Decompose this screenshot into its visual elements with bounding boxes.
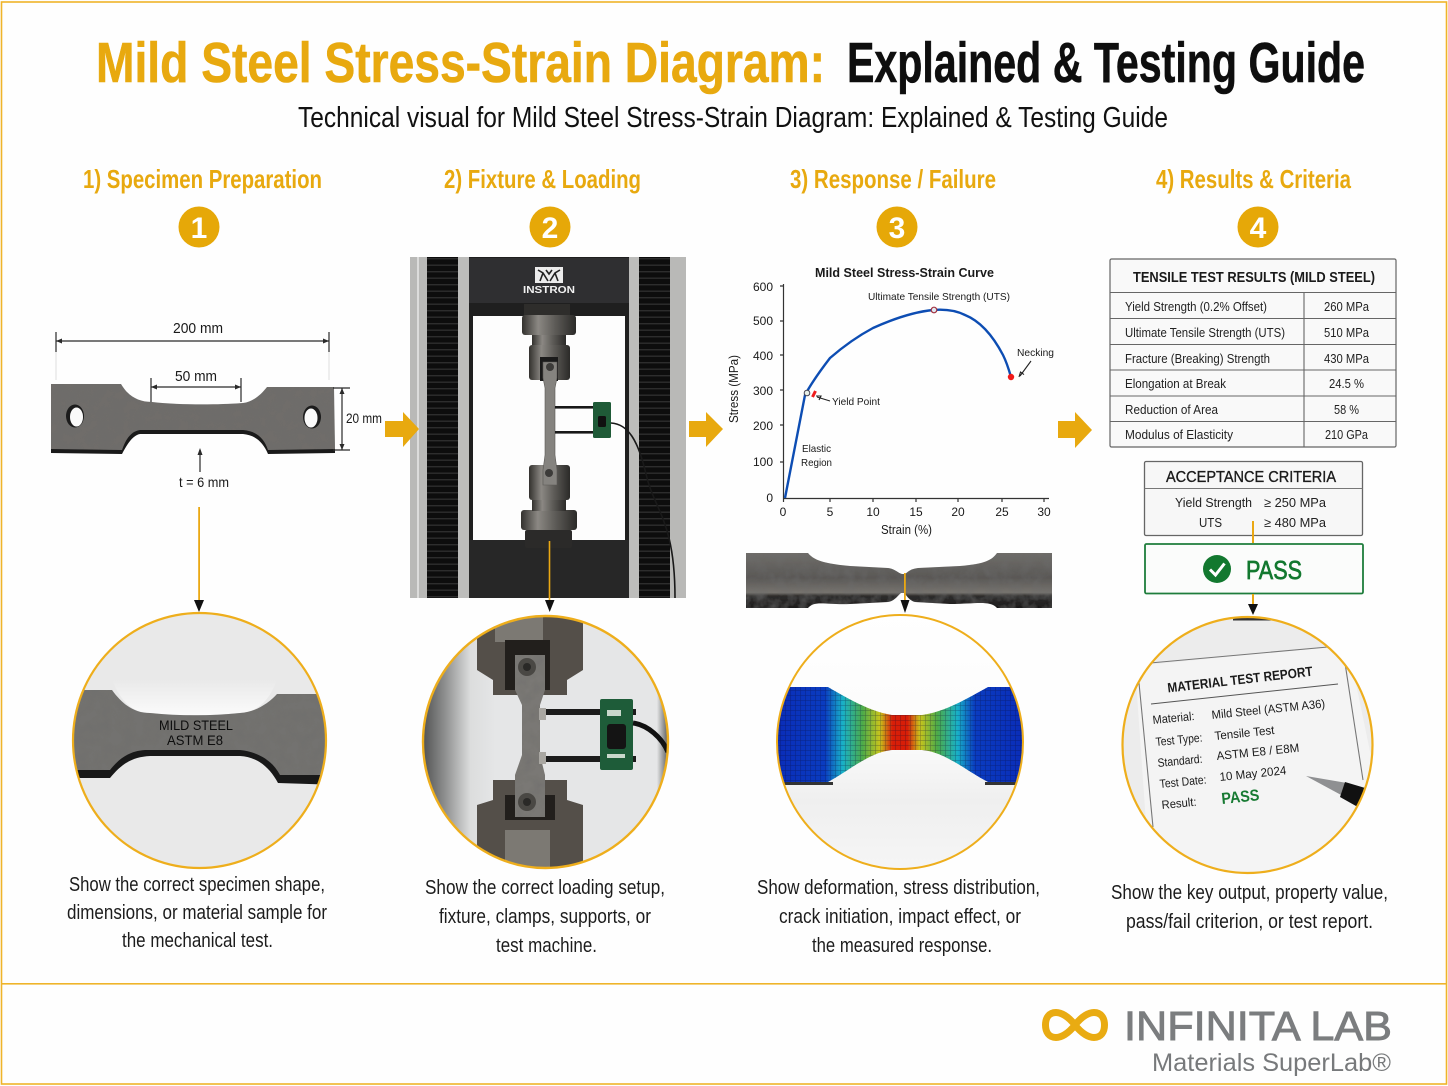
detail circle: engraved specimen: ASTM E8 <box>167 732 223 748</box>
detail circle: test report: MATERIAL TEST REPORT <box>1167 664 1314 695</box>
results table: 260 MPa <box>1324 299 1370 314</box>
caption 1: Show the correct specimen shape, <box>69 874 325 896</box>
necked specimen photo <box>746 553 1052 608</box>
heading: step 1: 1) Specimen Preparation <box>83 164 322 194</box>
detail circle: test report: PASS <box>1221 787 1260 808</box>
detail circle: engraved specimen: MILD STEEL <box>159 717 233 733</box>
caption 1: the mechanical test. <box>122 930 273 952</box>
caption 4: Show the key output, property value, <box>1111 882 1388 904</box>
panel: 2 fixture and loading <box>410 164 686 957</box>
caption 3: Show deformation, stress distribution, <box>757 877 1040 899</box>
detail circle: test report: Tensile Test <box>1214 723 1276 743</box>
stress-strain chart: Mild Steel Stress-Strain Curve <box>815 265 994 280</box>
detail circle: test report: Material: <box>1152 709 1195 727</box>
results table: 430 MPa <box>1324 351 1370 366</box>
stress-strain chart: Strain (%) <box>881 523 932 537</box>
caption 2: Show the correct loading setup, <box>425 877 665 899</box>
stress-strain chart: 300 <box>753 384 773 398</box>
stress-strain chart <box>727 265 1054 537</box>
panel: 3 response and failure <box>727 164 1054 957</box>
results table: Reduction of Area <box>1125 402 1219 417</box>
icon: infinity <box>1046 1012 1104 1038</box>
caption 3: the measured response. <box>812 935 992 957</box>
stress-strain chart: Region <box>801 457 832 469</box>
detail circle: test report: Standard: <box>1157 752 1203 770</box>
detail circle: engraved specimen <box>60 610 340 872</box>
stress-strain chart: 30 <box>1037 505 1051 519</box>
panel: 4 results and criteria <box>1110 164 1396 933</box>
acceptance criteria box: ACCEPTANCE CRITERIA <box>1166 469 1336 486</box>
stress-strain chart: 0 <box>766 491 773 505</box>
stress-strain chart: 0 <box>780 505 787 519</box>
detail circle: test report: Test Type: <box>1155 731 1203 749</box>
stress-strain chart: 100 <box>753 455 773 469</box>
number badge 1 <box>178 206 220 248</box>
arrow: pass to report <box>1248 594 1258 615</box>
acceptance criteria box: ≥ 480 MPa <box>1264 515 1327 530</box>
stress-strain chart: 200 <box>753 419 773 433</box>
caption 2: fixture, clamps, supports, or <box>439 906 651 928</box>
specimen with dimensions: 50 mm <box>175 368 217 385</box>
stress-strain chart: 400 <box>753 349 773 363</box>
acceptance criteria box: ≥ 250 MPa <box>1264 495 1327 510</box>
results table: Fracture (Breaking) Strength <box>1125 351 1270 366</box>
specimen with dimensions: t = 6 mm <box>179 474 229 490</box>
test machine: INSTRON <box>523 285 575 296</box>
results table <box>1110 259 1396 447</box>
footer logo <box>1046 1003 1392 1077</box>
caption 2: test machine. <box>496 935 597 957</box>
stress-strain chart: 20 <box>951 505 965 519</box>
results table: 210 GPa <box>1325 427 1369 442</box>
subtitle: Technical visual for Mild Steel Stress-Strain Diagram: Explained & Testing Guide <box>298 102 1168 134</box>
results table: Yield Strength (0.2% Offset) <box>1125 299 1267 314</box>
stress-strain chart: 500 <box>753 314 773 328</box>
acceptance criteria box: UTS <box>1199 515 1222 530</box>
stress-strain chart: 10 <box>866 505 880 519</box>
detail circle: test report: ASTM E8 / E8M <box>1216 741 1300 763</box>
stress-strain chart: Necking <box>1017 347 1054 359</box>
arrow: step 2 to 3 <box>689 412 723 447</box>
number badge 3: 3 <box>889 212 905 245</box>
heading: step 3: 3) Response / Failure <box>790 164 996 194</box>
test machine <box>410 257 686 598</box>
number badge 1: 1 <box>191 212 207 245</box>
stress-strain chart: Stress (MPa) <box>727 355 741 423</box>
detail circle: test report: 10 May 2024 <box>1219 763 1287 784</box>
brand tagline: Materials SuperLab® <box>1152 1049 1392 1077</box>
results table: 510 MPa <box>1324 325 1370 340</box>
caption 4: pass/fail criterion, or test report. <box>1126 911 1373 933</box>
caption 2 <box>425 877 665 957</box>
results table: Modulus of Elasticity <box>1125 427 1233 442</box>
specimen with dimensions: 20 mm <box>346 410 382 426</box>
detail circle: test report: Test Date: <box>1159 773 1207 791</box>
stress-strain chart: 600 <box>753 280 773 294</box>
acceptance criteria box: Yield Strength <box>1175 495 1252 510</box>
results table: Elongation at Break <box>1125 376 1226 391</box>
specimen with dimensions: 200 mm <box>173 320 223 337</box>
heading: step 4: 4) Results & Criteria <box>1156 164 1351 194</box>
results table: 24.5 % <box>1329 376 1364 391</box>
acceptance criteria box <box>1144 462 1362 543</box>
results table: 58 % <box>1334 402 1359 417</box>
stress-strain chart: 15 <box>909 505 923 519</box>
heading: step 2: 2) Fixture & Loading <box>444 164 641 194</box>
detail circle: stress map <box>775 612 1025 874</box>
pass badge <box>1145 544 1363 594</box>
arrow: step 3 to 4 <box>1058 412 1092 448</box>
stress-strain chart: Yield Point <box>832 396 880 408</box>
caption 3 <box>757 877 1040 957</box>
arrow: step 1 to 2 <box>385 412 419 447</box>
number badge 3 <box>876 206 918 248</box>
results table: TENSILE TEST RESULTS (MILD STEEL) <box>1133 269 1375 286</box>
specimen with dimensions <box>51 320 382 490</box>
stress-strain chart: Elastic <box>802 443 831 455</box>
arrow: machine to detail <box>545 541 554 612</box>
panel: 1 specimen preparation <box>51 164 382 952</box>
caption 1: dimensions, or material sample for <box>67 902 327 924</box>
number badge 2 <box>530 206 570 248</box>
arrow: specimen to detail <box>194 507 204 612</box>
caption 1 <box>67 874 327 952</box>
detail circle: grips and extensometer <box>420 612 672 872</box>
arrow: specimen to detail <box>900 573 910 613</box>
stress-strain chart: Ultimate Tensile Strength (UTS) <box>868 291 1010 303</box>
caption 3: crack initiation, impact effect, or <box>779 906 1021 928</box>
detail circle: test report: Result: <box>1161 795 1197 812</box>
brand name: INFINITA LAB <box>1124 1003 1392 1049</box>
caption 4 <box>1111 882 1388 933</box>
number badge 4: 4 <box>1250 212 1267 245</box>
pass badge: PASS <box>1246 555 1302 585</box>
stress-strain chart: 25 <box>995 505 1009 519</box>
number badge 2: 2 <box>542 212 558 245</box>
detail circle: test report: Mild Steel (ASTM A36) <box>1211 697 1326 722</box>
detail circle: test report <box>1120 615 1380 880</box>
stress-strain chart: 5 <box>827 505 834 519</box>
number badge 4 <box>1238 206 1278 248</box>
title: Mild Steel Stress-Strain Diagram: <box>96 31 825 95</box>
results table: Ultimate Tensile Strength (UTS) <box>1125 325 1285 340</box>
